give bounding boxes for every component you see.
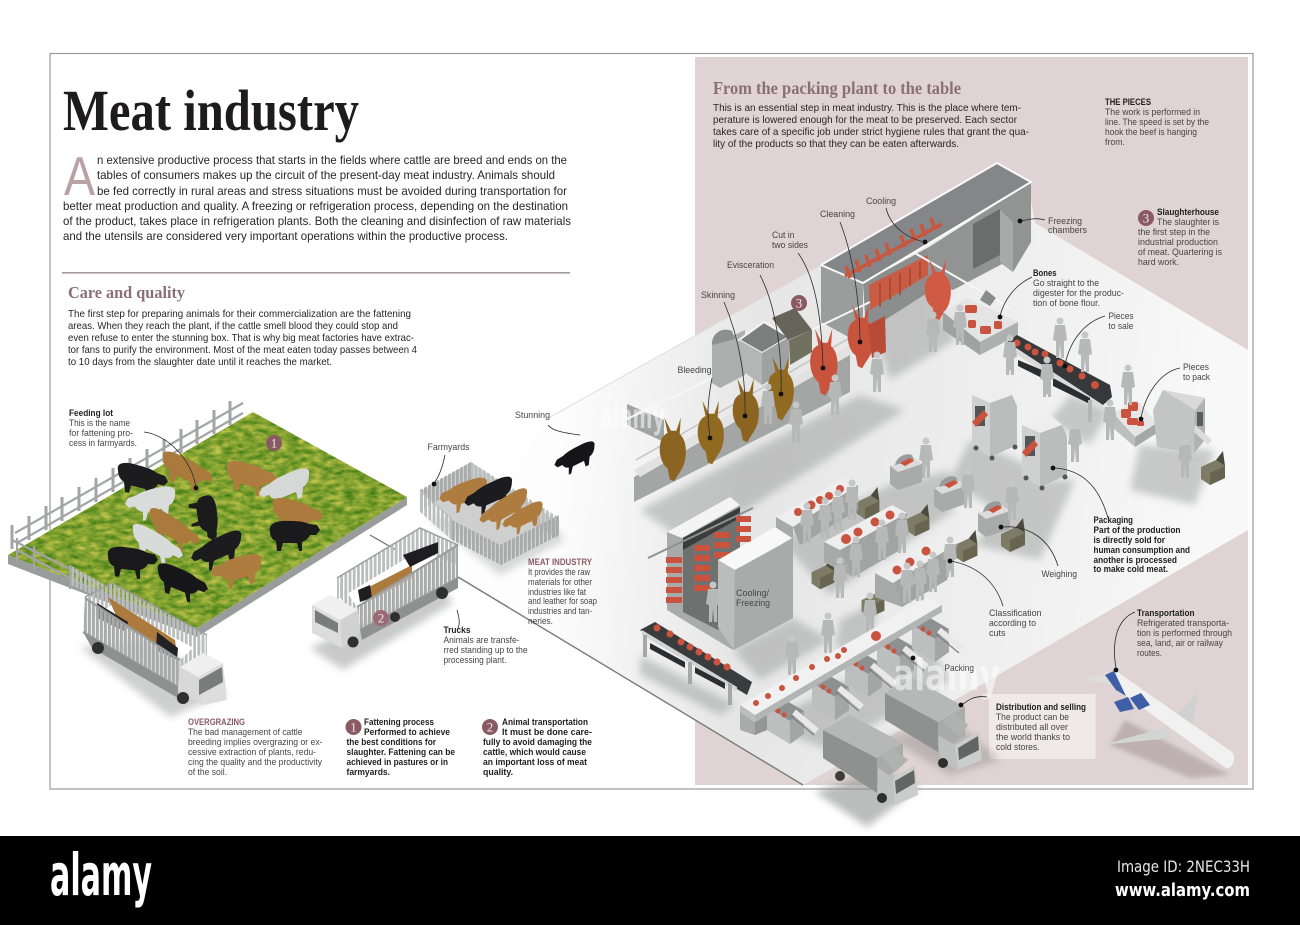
footer band	[0, 836, 1300, 925]
heading: care and quality: Care and quality	[68, 283, 185, 302]
hanging meat upper	[845, 218, 942, 278]
left end wall	[821, 265, 863, 345]
main belt	[740, 597, 942, 715]
far side fence	[112, 583, 207, 655]
label: distribution and selling: the world thanks to	[996, 731, 1070, 742]
stunning box and black bull	[554, 385, 670, 482]
text: care and quality: tor fans to purify the environment. Most of the meat eaten today passes between 4	[68, 345, 417, 356]
slaughterhouse note: 3	[1143, 210, 1149, 226]
label: meat industry: materials for other	[528, 576, 592, 587]
label: transportation	[1137, 607, 1232, 658]
label: overgrazing: cing the quality and the productivity	[188, 756, 322, 767]
table pieces to pack	[1113, 400, 1157, 447]
label: weighing: Weighing	[1042, 568, 1077, 579]
label: transportation: Refrigerated transporta-	[1137, 617, 1229, 628]
label: meat industry: industries and tan-	[528, 605, 592, 616]
gate	[70, 565, 105, 600]
heading: from the packing plant: From the packing plant to the table	[713, 78, 961, 98]
label: feeding lot: This is the name	[69, 417, 130, 428]
note: animal transportation: an important loss of meat	[483, 756, 587, 767]
label: process steps: Cleaning	[820, 208, 855, 219]
note: fattening process: the best conditions for	[346, 736, 436, 747]
rack meat	[666, 516, 751, 603]
intro text block: better meat production and quality. A freezing or refrigeration process, depending on the destination	[63, 200, 568, 213]
conveyor pieces to sale	[1007, 335, 1112, 422]
cows in pasture	[108, 447, 323, 610]
cattle load	[108, 597, 177, 655]
label: pieces to pack	[1183, 361, 1210, 382]
intro text block: be fed correctly in rural areas and stress situations must be avoided during transportation for	[97, 185, 567, 198]
label: pieces to sale	[1108, 310, 1134, 331]
note: fattening process: achieved in pastures or in	[346, 756, 448, 767]
label: overgrazing: The bad management of cattle	[188, 726, 302, 737]
label: classification	[989, 607, 1042, 638]
website: www.alamy.com	[1115, 880, 1250, 901]
cab	[877, 743, 903, 785]
label: distribution and selling: distributed all over	[996, 721, 1068, 732]
packing line	[740, 597, 962, 744]
cardboard boxes	[812, 451, 1225, 617]
text: from the packing plant: This is an essential step in meat industry. This is the place where tem-	[713, 103, 1021, 114]
label: bones: digester for the produc-	[1033, 287, 1124, 298]
packaging machine right	[1153, 390, 1212, 453]
label: distribution and selling	[996, 701, 1086, 752]
far side fence	[337, 528, 420, 600]
label: process steps: Cooling	[866, 195, 896, 206]
number badges: 3	[796, 296, 802, 310]
text: from the packing plant: perature is lowered enough for the meat to be preserved. Each sector	[713, 115, 1018, 126]
workers	[761, 304, 1192, 675]
outer frame	[50, 54, 1253, 789]
label: trucks: Animals are transfe-	[444, 634, 520, 645]
end fence	[180, 635, 207, 680]
text: from the packing plant: lity of the products so that they can be eaten afterwards.	[713, 139, 959, 150]
hanging carcasses	[660, 259, 951, 481]
label: process steps: Evisceration	[727, 259, 774, 270]
label: meat industry: industries like fat	[528, 586, 586, 597]
pen floor	[420, 462, 559, 563]
label: pieces to sale: Pieces	[1108, 310, 1134, 321]
number badges	[266, 295, 807, 451]
cooling box	[734, 538, 793, 650]
note: fattening process: Fattening process	[364, 716, 434, 727]
door	[973, 209, 1000, 269]
label: distribution and selling: The product can be	[996, 711, 1069, 722]
text: from the packing plant: takes care of a specific job under strict hygiene rules that grant the qua-	[713, 127, 1029, 138]
near side fence	[357, 545, 458, 630]
label: packaging: human consumption and	[1094, 544, 1190, 555]
cab	[938, 707, 965, 752]
overhead rail	[625, 252, 1010, 420]
pasture grass	[8, 412, 407, 628]
slaughterhouse note	[1138, 206, 1222, 267]
front fences	[452, 515, 559, 565]
the pieces note: THE PIECES	[1105, 96, 1151, 107]
fuselage	[1106, 671, 1234, 768]
rack worker	[706, 582, 720, 622]
label: transportation: routes.	[1137, 647, 1162, 658]
text: care and quality: areas. When they reach the plant, if the cattle smell blood they could stop and	[68, 321, 398, 332]
hanging meat lower	[869, 255, 928, 310]
label: process steps: Bleeding	[678, 364, 712, 375]
note: animal transportation: fully to avoid damaging the	[483, 736, 592, 747]
floor edge lines	[370, 265, 821, 785]
intro text block: A	[64, 145, 95, 207]
label: packaging: another is processed	[1094, 554, 1177, 565]
label: packaging	[1094, 514, 1190, 574]
text: from the packing plant	[713, 103, 1029, 150]
note: animal transportation	[482, 716, 592, 777]
intro text block: and the utensils are considered very important operations within the productive process.	[63, 230, 508, 243]
pen shadow	[430, 510, 565, 575]
label: classification: according to	[989, 617, 1036, 628]
packaging machines	[972, 382, 1212, 490]
line base	[740, 712, 755, 735]
label: classification: Classification	[989, 607, 1042, 618]
label: bones	[1033, 267, 1124, 308]
note: fattening process: slaughter. Fattening can be	[346, 746, 455, 757]
number badge 2	[373, 610, 389, 626]
cattle truck two: 2	[378, 610, 384, 626]
shadow	[885, 730, 1000, 775]
label: trucks: processing plant.	[444, 654, 506, 665]
delivery truck A	[885, 678, 1000, 775]
the pieces note: from.	[1105, 136, 1125, 147]
watermark marks	[600, 397, 1000, 701]
farmyard pen	[420, 462, 565, 575]
label: pieces to sale: to sale	[1108, 320, 1134, 331]
cooling label: Freezing	[736, 597, 770, 608]
note: fattening process: farmyards.	[346, 766, 390, 777]
intro text block: n extensive productive process that starts in the fields where cattle are breed and ends on the	[97, 154, 567, 167]
weighing machines	[890, 454, 1010, 537]
label: overgrazing	[188, 716, 322, 777]
label: overgrazing: cessive extraction of plants, redu-	[188, 746, 316, 757]
feeding lot pasture	[8, 401, 407, 637]
note: fattening process: Performed to achieve	[364, 726, 450, 737]
label: trucks	[444, 624, 528, 665]
label: bones: tion of bone flour.	[1033, 297, 1100, 308]
classification tables	[776, 478, 958, 607]
text: care and quality: even refuse to enter the stunning box. That is why big meat factories have extrac-	[68, 333, 414, 344]
label: bones: Go straight to the	[1033, 277, 1099, 288]
label: pieces to pack: to pack	[1183, 371, 1210, 382]
slaughterhouse note: hard work.	[1138, 256, 1179, 267]
rack back wall	[667, 497, 740, 650]
label: process steps: Cut in	[772, 229, 794, 240]
the pieces note: hook the beef is hanging	[1105, 126, 1197, 137]
leader lines	[144, 208, 1180, 707]
label: feeding lot	[69, 407, 137, 448]
label: meat industry: MEAT INDUSTRY	[528, 556, 593, 567]
label: packaging: Part of the production	[1094, 524, 1181, 535]
cab	[312, 595, 358, 620]
label: meat industry: It provides the raw	[528, 566, 590, 577]
label: feeding lot: Feeding lot	[69, 407, 113, 418]
label: meat industry: and leather for soap	[528, 595, 597, 606]
label: transportation: sea, land, air or railway	[1137, 637, 1223, 648]
wheels	[348, 636, 358, 648]
label: transportation: tion is performed through	[1137, 627, 1232, 638]
watermark marks: alamy	[893, 650, 1000, 701]
cooling and freezing unit	[648, 497, 793, 650]
cattle truck two	[310, 528, 458, 670]
box roof	[823, 715, 903, 758]
intro text block	[63, 145, 571, 243]
slaughterhouse note: the first step in the	[1138, 226, 1210, 237]
building: freezing chambers	[821, 163, 1031, 345]
cattle truck one	[80, 583, 227, 717]
label: packing: Packing	[944, 662, 974, 673]
label: process steps: Skinning	[701, 289, 735, 300]
intro text block: tables of consumers makes up the circuit of the present-day meat industry. Animals should	[97, 169, 555, 182]
end fence	[337, 578, 360, 630]
label: classification: cuts	[989, 627, 1006, 638]
back fences	[420, 462, 471, 510]
shadow	[815, 770, 920, 827]
truck shadow	[80, 640, 227, 717]
tail	[1083, 660, 1120, 684]
image id: Image ID: 2NEC33H	[1117, 857, 1250, 876]
floor shadows	[640, 285, 1215, 750]
slaughterhouse note: The slaughter is	[1157, 216, 1219, 227]
plane shadow	[1110, 720, 1230, 778]
label: trucks: Trucks	[444, 624, 470, 635]
note: fattening process: 1	[350, 720, 357, 734]
pasture soil edge	[8, 497, 407, 637]
side fence	[12, 538, 100, 594]
label: overgrazing: of the soil.	[188, 766, 227, 777]
label: meat industry: neries.	[528, 615, 553, 626]
cooling label: Cooling/	[736, 587, 769, 598]
butchers table and bones	[943, 290, 1018, 355]
watermark marks: alamy	[600, 397, 665, 437]
note: animal transportation: 2	[487, 720, 493, 734]
wall opening	[863, 247, 932, 332]
label: process steps: two sides	[772, 239, 808, 250]
text: care and quality: The first step for preparing animals for their commercialization are the fattening	[68, 309, 411, 320]
text: care and quality	[68, 309, 417, 368]
chamber interior	[821, 163, 1031, 283]
slaughterhouse note: Slaughterhouse	[1157, 206, 1219, 217]
label: packaging: Packaging	[1094, 514, 1133, 525]
back fence	[12, 401, 243, 549]
box side	[885, 693, 938, 752]
label: freezing chambers: chambers	[1048, 224, 1087, 235]
chassis	[360, 578, 458, 640]
label: process steps	[678, 195, 896, 375]
label: pieces to pack: Pieces	[1183, 361, 1209, 372]
note: animal transportation: Animal transportation	[502, 716, 588, 727]
label: distribution and selling: cold stores.	[996, 741, 1040, 752]
label: feeding lot: cess in farmyards.	[69, 437, 137, 448]
label: bones: Bones	[1033, 267, 1056, 278]
sorting tables	[767, 697, 817, 744]
cooling label	[736, 587, 770, 608]
airplane	[1083, 660, 1234, 778]
rim	[821, 163, 1031, 283]
pen cattle	[439, 474, 487, 519]
label: freezing chambers	[1048, 215, 1087, 235]
truck shadow	[310, 585, 453, 670]
label: trucks: rred standing up to the	[444, 644, 528, 655]
text: care and quality: to 10 days from the slaughter date until it reaches the market.	[68, 357, 332, 368]
long wall	[926, 182, 1031, 290]
label: packaging: is directly sold for	[1094, 534, 1165, 545]
wings	[1175, 692, 1198, 727]
note: animal transportation: It must be done care-	[502, 726, 592, 737]
label: farmyards: Farmyards	[428, 441, 470, 452]
label: meat industry	[528, 556, 597, 626]
label: transportation: Transportation	[1137, 607, 1195, 618]
slaughterhouse note: of meat. Quartering is	[1138, 246, 1222, 257]
label: overgrazing: OVERGRAZING	[188, 716, 245, 727]
label: feeding lot: for fattening pro-	[69, 427, 133, 438]
box side	[823, 730, 877, 793]
the pieces note: The work is performed in	[1105, 106, 1200, 117]
intro text block: of the product, takes place in refrigeration plants. Both the cleaning and disinfection of raw materials	[63, 215, 571, 228]
panel: from the packing plant to the table	[695, 57, 1248, 785]
label: stunning: Stunning	[515, 409, 550, 420]
rack rail	[648, 508, 753, 558]
divider rule	[62, 272, 570, 274]
cab	[180, 653, 223, 677]
chassis	[83, 632, 178, 698]
conveyor lower left	[640, 622, 752, 705]
plant floor	[458, 200, 1248, 785]
the pieces note	[1105, 96, 1209, 147]
title: Meat industry	[63, 78, 359, 143]
distribution note box	[989, 694, 1096, 759]
box roof	[885, 678, 965, 722]
cattle load	[363, 565, 412, 600]
label: freezing chambers: Freezing	[1048, 215, 1082, 226]
note: animal transportation: quality.	[483, 766, 513, 777]
label: distribution and selling: Distribution and selling	[996, 701, 1086, 712]
delivery truck B	[815, 715, 920, 827]
wheels	[92, 642, 104, 654]
tanks	[712, 308, 812, 388]
footer logo: alamy	[50, 841, 152, 909]
label: overgrazing: breeding implies overgrazing or ex-	[188, 736, 322, 747]
label: packaging: to make cold meat.	[1094, 563, 1168, 574]
near side fence	[83, 598, 180, 687]
note: fattening process	[346, 716, 455, 777]
number badges: 1	[271, 436, 277, 450]
slaughter line platform	[634, 332, 860, 502]
note: animal transportation: cattle, which would cause	[483, 746, 586, 757]
the pieces note: line. The speed is set by the	[1105, 116, 1209, 127]
slaughterhouse note: industrial production	[1138, 236, 1218, 247]
